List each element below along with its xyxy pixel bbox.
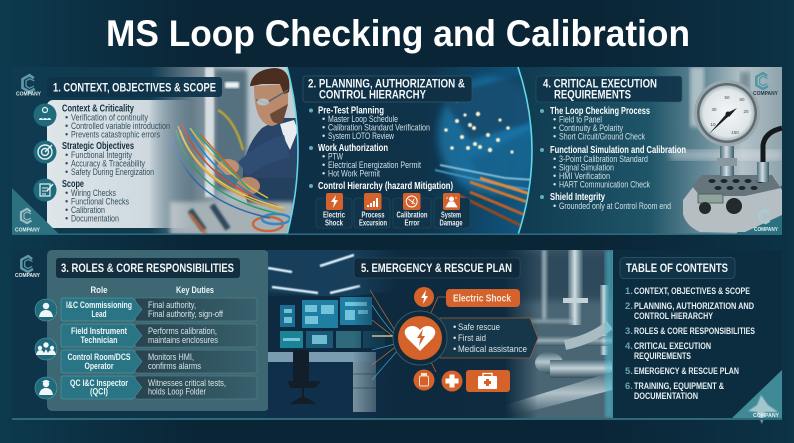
text: work authorization: Hot Work Permit <box>328 168 380 178</box>
icon: inspector <box>35 377 57 399</box>
role row: QC inspector: holds Loop Folder <box>148 386 206 396</box>
contents list: 2. <box>625 300 633 311</box>
icon: document <box>34 178 56 202</box>
illustration: pressure gauge on calibrator: 150 <box>731 130 739 135</box>
text: scope: • <box>65 214 68 224</box>
text: functional simulation and calibration: HMI Verification <box>559 171 610 181</box>
rescue steps list: First aid <box>458 332 486 343</box>
icon: technician group <box>35 338 57 360</box>
text: pre-test planning <box>309 106 430 141</box>
text: work authorization <box>309 143 421 178</box>
rescue steps list: Safe rescue <box>458 321 500 332</box>
section header: 4. CRITICAL EXECUTION <box>543 76 657 90</box>
text: functional simulation and calibration: 3-Point Calibration Standard <box>559 154 648 164</box>
heading <box>620 258 735 278</box>
role row: control room operator: Operator <box>84 360 114 371</box>
role row: field instrument technician: Field Instrument <box>71 325 127 336</box>
role row: field instrument technician: Performs calibration, <box>148 325 217 336</box>
icon: electric shock <box>414 287 434 307</box>
text: work authorization: • <box>322 168 325 178</box>
illustration: pressure gauge on calibrator: 50 <box>724 95 730 100</box>
text: pre-test planning: • <box>322 131 325 141</box>
contents list: 4. <box>625 340 633 351</box>
hazard card: calibration error: Error <box>404 218 420 228</box>
decor: glowing data lines <box>370 290 398 380</box>
section header: CONTROL HIERARCHY <box>319 88 426 102</box>
hazard card: process excursion: Process <box>362 210 385 220</box>
text: functional simulation and calibration: Functional Simulation and Calibration <box>550 145 686 156</box>
text: context and criticality: • <box>65 130 68 140</box>
logo: COMPANY <box>15 273 40 279</box>
rescue steps list <box>440 318 538 358</box>
panel: emergency and rescue plan <box>268 250 613 418</box>
hazard card: electric shock: Shock <box>325 218 343 228</box>
text: functional simulation and calibration: • <box>553 162 556 172</box>
illustration: pressure gauge on calibrator: 20 <box>743 109 749 114</box>
text: the loop checking process: • <box>553 132 556 142</box>
role row: QC inspector: (QCI) <box>90 386 108 396</box>
text: strategic objectives: Accuracy & Traceability <box>71 158 145 168</box>
section header <box>303 76 472 102</box>
role row: control room operator: Monitors HMI, <box>148 351 194 362</box>
hazard card: process excursion <box>354 193 390 228</box>
text: pre-test planning: System LOTO Review <box>328 131 394 141</box>
corner with logo: COMPANY <box>753 413 779 419</box>
contents list: 1. <box>625 285 633 296</box>
text: context and criticality <box>62 104 170 140</box>
hazard card: process excursion: Excursion <box>359 218 387 228</box>
bottom edge line <box>12 418 782 420</box>
panel: context, objectives and scope <box>12 67 305 235</box>
photo: technician with wires <box>150 67 305 235</box>
icon: first aid kit <box>466 370 510 392</box>
corner with logo <box>12 188 60 235</box>
panel: table of contents <box>612 250 782 424</box>
rescue steps list: • <box>453 332 456 343</box>
role row: QC inspector <box>61 376 257 399</box>
icon: target <box>34 140 56 164</box>
role row: QC inspector: Witnesses critical tests, <box>148 377 226 388</box>
contents list: ROLES & CORE RESPONSIBILITIES <box>634 325 755 336</box>
text: the loop checking process: Field to Panel <box>559 114 602 124</box>
illustration: pressure gauge on calibrator: 60 <box>739 97 745 102</box>
role row: control room operator: confirms alarms <box>148 360 201 371</box>
panel: planning, authorization and control hierarchy <box>287 67 542 235</box>
rescue steps list: • <box>453 343 456 354</box>
glowing arcs between panels <box>12 67 782 235</box>
text: scope: Calibration <box>71 205 105 215</box>
text: strategic objectives: • <box>65 150 68 160</box>
role row: control room operator: Control Room/DCS <box>68 351 130 362</box>
text: control hierarchy: Control Hierarchy (hazard Mitigation) <box>318 181 453 192</box>
illustration: fibre optics <box>434 74 531 228</box>
role row: field instrument technician: Technician <box>80 334 118 345</box>
text: scope: Scope <box>62 179 84 190</box>
role row: I&C commissioning lead: Lead <box>92 308 107 319</box>
text: shield integrity: • <box>553 201 556 211</box>
text: scope: • <box>65 188 68 198</box>
text: scope: Wiring Checks <box>71 188 116 198</box>
contents list: CRITICAL EXECUTION <box>634 340 711 351</box>
text: pre-test planning: Master Loop Schedule <box>328 114 398 124</box>
contents list: CONTEXT, OBJECTIVES & SCOPE <box>634 285 750 296</box>
hazard card: system damage: Damage <box>440 218 463 228</box>
label: electric shock: Electric Shock <box>453 294 511 304</box>
text: functional simulation and calibration <box>540 145 686 190</box>
text: the loop checking process: • <box>553 123 556 133</box>
title: MS Loop Checking and Calibration <box>106 13 690 54</box>
panel: roles and core responsibilities <box>12 250 269 418</box>
text: functional simulation and calibration: HART Communication Check <box>559 180 650 190</box>
table column headings: Role <box>90 285 108 296</box>
section header: 3. ROLES & CORE RESPONSIBILITIES <box>61 261 234 275</box>
text: scope: Documentation <box>71 214 119 224</box>
rescue steps list: Medical assistance <box>458 343 527 354</box>
contents list: PLANNING, AUTHORIZATION AND <box>634 300 754 311</box>
hazard card: calibration error <box>393 193 431 228</box>
hazard card: electric shock <box>316 193 352 228</box>
text: shield integrity: Grounded only at Control Room end <box>559 201 671 211</box>
hazard card: system damage <box>434 193 470 228</box>
illustration: pressure gauge on calibrator <box>683 80 782 232</box>
text: functional simulation and calibration: • <box>553 154 556 164</box>
logo top-right <box>753 73 778 97</box>
role row: QC inspector: QC I&C Inspector <box>70 377 128 388</box>
text: context and criticality: Verification of continuity <box>71 112 148 122</box>
contents list: EMERGENCY & RESCUE PLAN <box>634 365 739 376</box>
section header: 1. CONTEXT, OBJECTIVES & SCOPE <box>53 80 216 94</box>
logo bottom-right <box>754 210 778 233</box>
contents list: CONTROL HIERARCHY <box>634 310 714 321</box>
contents list: REQUIREMENTS <box>634 350 691 361</box>
hazard card: system damage: System <box>441 210 461 220</box>
text: strategic objectives: • <box>65 158 68 168</box>
text: pre-test planning: • <box>322 114 325 124</box>
logo top-left: COMPANY <box>16 92 41 98</box>
text: context and criticality: • <box>65 121 68 131</box>
section header <box>354 258 520 278</box>
contents list: DOCUMENTATION <box>634 390 698 401</box>
text: shield integrity <box>540 192 671 211</box>
text: strategic objectives: Functional Integrity <box>71 150 132 160</box>
text: context and criticality: Prevents catastrophic errors <box>71 130 160 140</box>
table column headings: Key Duties <box>176 285 214 296</box>
section header <box>536 76 682 102</box>
text: work authorization: Work Authorization <box>318 143 388 154</box>
contents list: 6. <box>625 380 633 391</box>
rescue steps list: • <box>453 321 456 332</box>
role row: I&C commissioning lead <box>61 298 257 321</box>
table column headings <box>90 285 214 296</box>
heading: TABLE OF CONTENTS <box>626 261 728 275</box>
role row: I&C commissioning lead: Final authority, sign-off <box>148 308 223 319</box>
text: scope: • <box>65 196 68 206</box>
content card <box>47 100 192 228</box>
section header: 5. EMERGENCY & RESCUE PLAN <box>361 261 512 275</box>
section header: 2. PLANNING, AUTHORIZATION & <box>308 76 465 90</box>
corner with logo: COMPANY <box>15 228 40 234</box>
text: scope: Functional Checks <box>71 196 129 206</box>
photo: control room <box>268 250 385 412</box>
label: electric shock <box>446 289 520 307</box>
text: the loop checking process <box>540 106 650 142</box>
hazard card: electric shock: Electric <box>323 210 345 220</box>
text: context and criticality: Controlled variable introduction <box>71 121 170 131</box>
contents list <box>625 285 755 401</box>
text: pre-test planning: Pre-Test Planning <box>318 106 384 116</box>
role row: I&C commissioning lead: I&C Commissioning <box>66 299 132 310</box>
section header: REQUIREMENTS <box>554 88 631 102</box>
panel: critical execution requirements <box>518 67 782 235</box>
text: strategic objectives: Strategic Objectives <box>62 141 134 152</box>
text: work authorization: Electrical Energization Permit <box>328 160 421 170</box>
illustration: pressure gauge on calibrator: 10 <box>710 122 716 127</box>
text: scope: • <box>65 205 68 215</box>
text: strategic objectives <box>62 141 154 177</box>
contents list: TRAINING, EQUIPMENT & <box>634 380 724 391</box>
text: context and criticality: Context & Criticality <box>62 104 134 114</box>
contents list: 5. <box>625 365 633 376</box>
role row: field instrument technician: maintains enclosures <box>148 334 218 345</box>
text: pre-test planning: Calibration Standard Verification <box>328 122 430 132</box>
logo top-right: COMPANY <box>753 91 778 97</box>
logo top-left <box>16 75 41 98</box>
text: the loop checking process: Short Circuit/Ground Check <box>559 132 645 142</box>
text: work authorization: • <box>322 152 325 162</box>
role row: field instrument technician <box>61 324 257 347</box>
text: work authorization: • <box>322 160 325 170</box>
text: shield integrity: Shield Integrity <box>550 192 605 203</box>
illustration: pressure gauge on calibrator: 30 <box>711 107 717 112</box>
logo bottom-right: COMPANY <box>754 227 778 233</box>
text: scope <box>62 179 129 224</box>
text: strategic objectives: • <box>65 167 68 177</box>
text: functional simulation and calibration: • <box>553 171 556 181</box>
logo <box>15 256 40 279</box>
role row: control room operator <box>61 350 257 373</box>
icon: lead person <box>35 299 57 321</box>
icon: plus <box>442 370 462 392</box>
text: the loop checking process: Continuity & Polarity <box>559 123 623 133</box>
text: pre-test planning: • <box>322 122 325 132</box>
corner with logo <box>732 370 782 424</box>
text: the loop checking process: • <box>553 114 556 124</box>
text: the loop checking process: The Loop Checking Process <box>550 106 650 117</box>
text: context and criticality: • <box>65 112 68 122</box>
text: functional simulation and calibration: Signal Simulation <box>559 162 614 172</box>
contents list: 3. <box>625 325 633 336</box>
connector lines <box>430 297 446 372</box>
text: strategic objectives: Safety During Energization <box>71 167 154 177</box>
section header <box>56 258 240 278</box>
section header <box>47 77 222 97</box>
text: work authorization: PTW <box>328 152 343 162</box>
icon: medicine bottle <box>414 370 434 390</box>
photo: industrial pipes <box>505 250 613 418</box>
hazard card: calibration error: Calibration <box>396 210 428 220</box>
icon: heart with lightning bolt <box>393 311 447 365</box>
icon: context network <box>34 104 56 126</box>
text: functional simulation and calibration: • <box>553 180 556 190</box>
role row: I&C commissioning lead: Final authority, <box>148 299 196 310</box>
